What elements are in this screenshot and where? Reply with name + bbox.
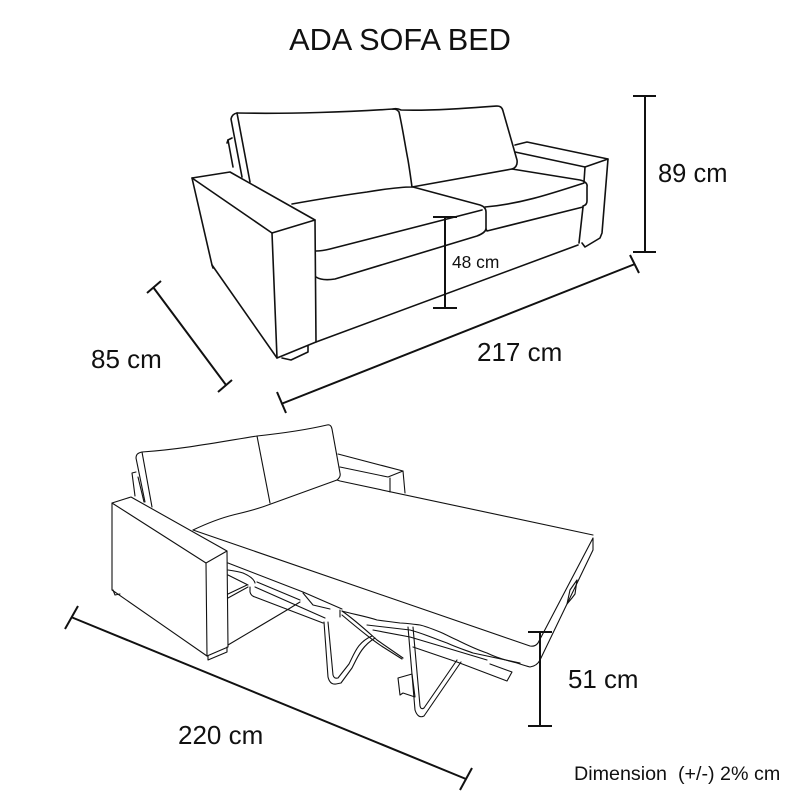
illustration: sofa upright (192, 106, 608, 360)
dimension: 51 cm: 51 cm (568, 666, 639, 694)
dimension: 89 cm (633, 96, 727, 252)
dimension: 220 cm: 220 cm (178, 720, 263, 750)
right arm (338, 454, 405, 493)
dimension: 48 cm (433, 217, 499, 308)
mattress (193, 480, 593, 667)
dimension: 89 cm: 89 cm (658, 160, 727, 188)
dimension: 51 cm (528, 632, 639, 726)
left arm (112, 497, 228, 660)
right arm (515, 142, 608, 247)
dimension: 48 cm: 48 cm (452, 252, 499, 272)
note: dimension tolerance: Dimension (+/-) 2% cm (574, 763, 780, 785)
dimension: 217 cm (277, 255, 639, 413)
title: ADA SOFA BED (289, 22, 511, 57)
left arm (192, 172, 316, 360)
back cushions (132, 425, 340, 507)
dimension: 85 cm (91, 281, 232, 392)
seat cushions (292, 169, 587, 342)
dimension: 217 cm: 217 cm (477, 337, 562, 367)
bed frame (228, 563, 520, 717)
dimension: 220 cm (65, 606, 472, 790)
illustration: sofa bed open (112, 425, 593, 717)
dimension: 85 cm: 85 cm (91, 344, 162, 374)
back cushions (227, 106, 517, 187)
